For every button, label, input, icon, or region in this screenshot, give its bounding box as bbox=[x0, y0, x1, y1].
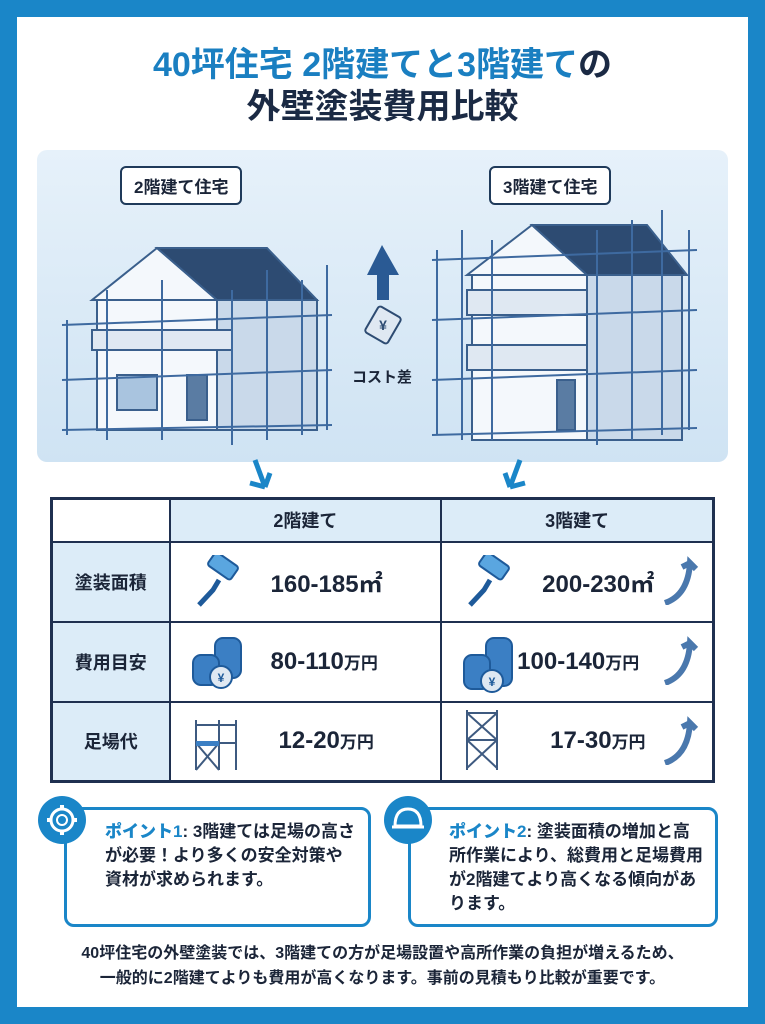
icon: helmet bbox=[384, 796, 432, 844]
point 1 box bbox=[64, 807, 371, 927]
comparison table: 17-30万円 bbox=[550, 727, 646, 754]
comparison table: ¥ bbox=[217, 670, 224, 684]
comparison table: 200-230㎡ bbox=[542, 571, 654, 598]
title bbox=[153, 46, 612, 126]
comparison table: 100-140万円 bbox=[517, 648, 639, 674]
comparison table: 12-20万円 bbox=[278, 727, 374, 754]
arrow up cost bbox=[367, 245, 399, 300]
footer text bbox=[81, 944, 684, 987]
label: 2階建て住宅: 2階建て住宅 bbox=[134, 178, 228, 197]
point 2 box bbox=[408, 807, 718, 927]
houses illustration: コスト差 bbox=[352, 368, 412, 386]
point 2 box: ポイント2: 塗装面積の増加と高所作業により、総費用と足場費用が2階建てより高くなる傾向があります。 bbox=[449, 822, 703, 913]
houses illustration: ¥ bbox=[379, 317, 387, 333]
arrows down bbox=[249, 459, 526, 490]
comparison table: 80-110万円 bbox=[270, 648, 378, 674]
comparison table: 塗装面積 bbox=[75, 572, 147, 592]
comparison table: 2階建て bbox=[273, 511, 337, 531]
label: 2階建て住宅 bbox=[120, 166, 242, 205]
houses illustration bbox=[62, 210, 697, 445]
label: 3階建て住宅 bbox=[489, 166, 611, 205]
comparison table: 足場代 bbox=[84, 732, 138, 752]
title: 外壁塗装費用比較 bbox=[246, 88, 518, 126]
comparison table bbox=[50, 497, 715, 783]
point 1 box: ポイント1: 3階建ては足場の高さが必要！より多くの安全対策や資材が求められます。 bbox=[105, 822, 355, 889]
title: 40坪住宅 2階建てと3階建ての bbox=[153, 46, 612, 84]
footer text: 40坪住宅の外壁塗装では、3階建ての方が足場設置や高所作業の負担が増えるため、 bbox=[81, 945, 684, 962]
panel: illustration bbox=[37, 150, 728, 462]
footer text: 一般的に2階建てよりも費用が高くなります。事前の見積もり比較が重要です。 bbox=[100, 970, 665, 987]
label: 3階建て住宅: 3階建て住宅 bbox=[503, 178, 597, 197]
comparison table: 160-185㎡ bbox=[270, 571, 383, 598]
comparison table: 3階建て bbox=[545, 511, 609, 531]
comparison table: ¥ bbox=[489, 674, 496, 688]
icon: gear bbox=[38, 796, 86, 844]
comparison table: 費用目安 bbox=[75, 652, 147, 672]
